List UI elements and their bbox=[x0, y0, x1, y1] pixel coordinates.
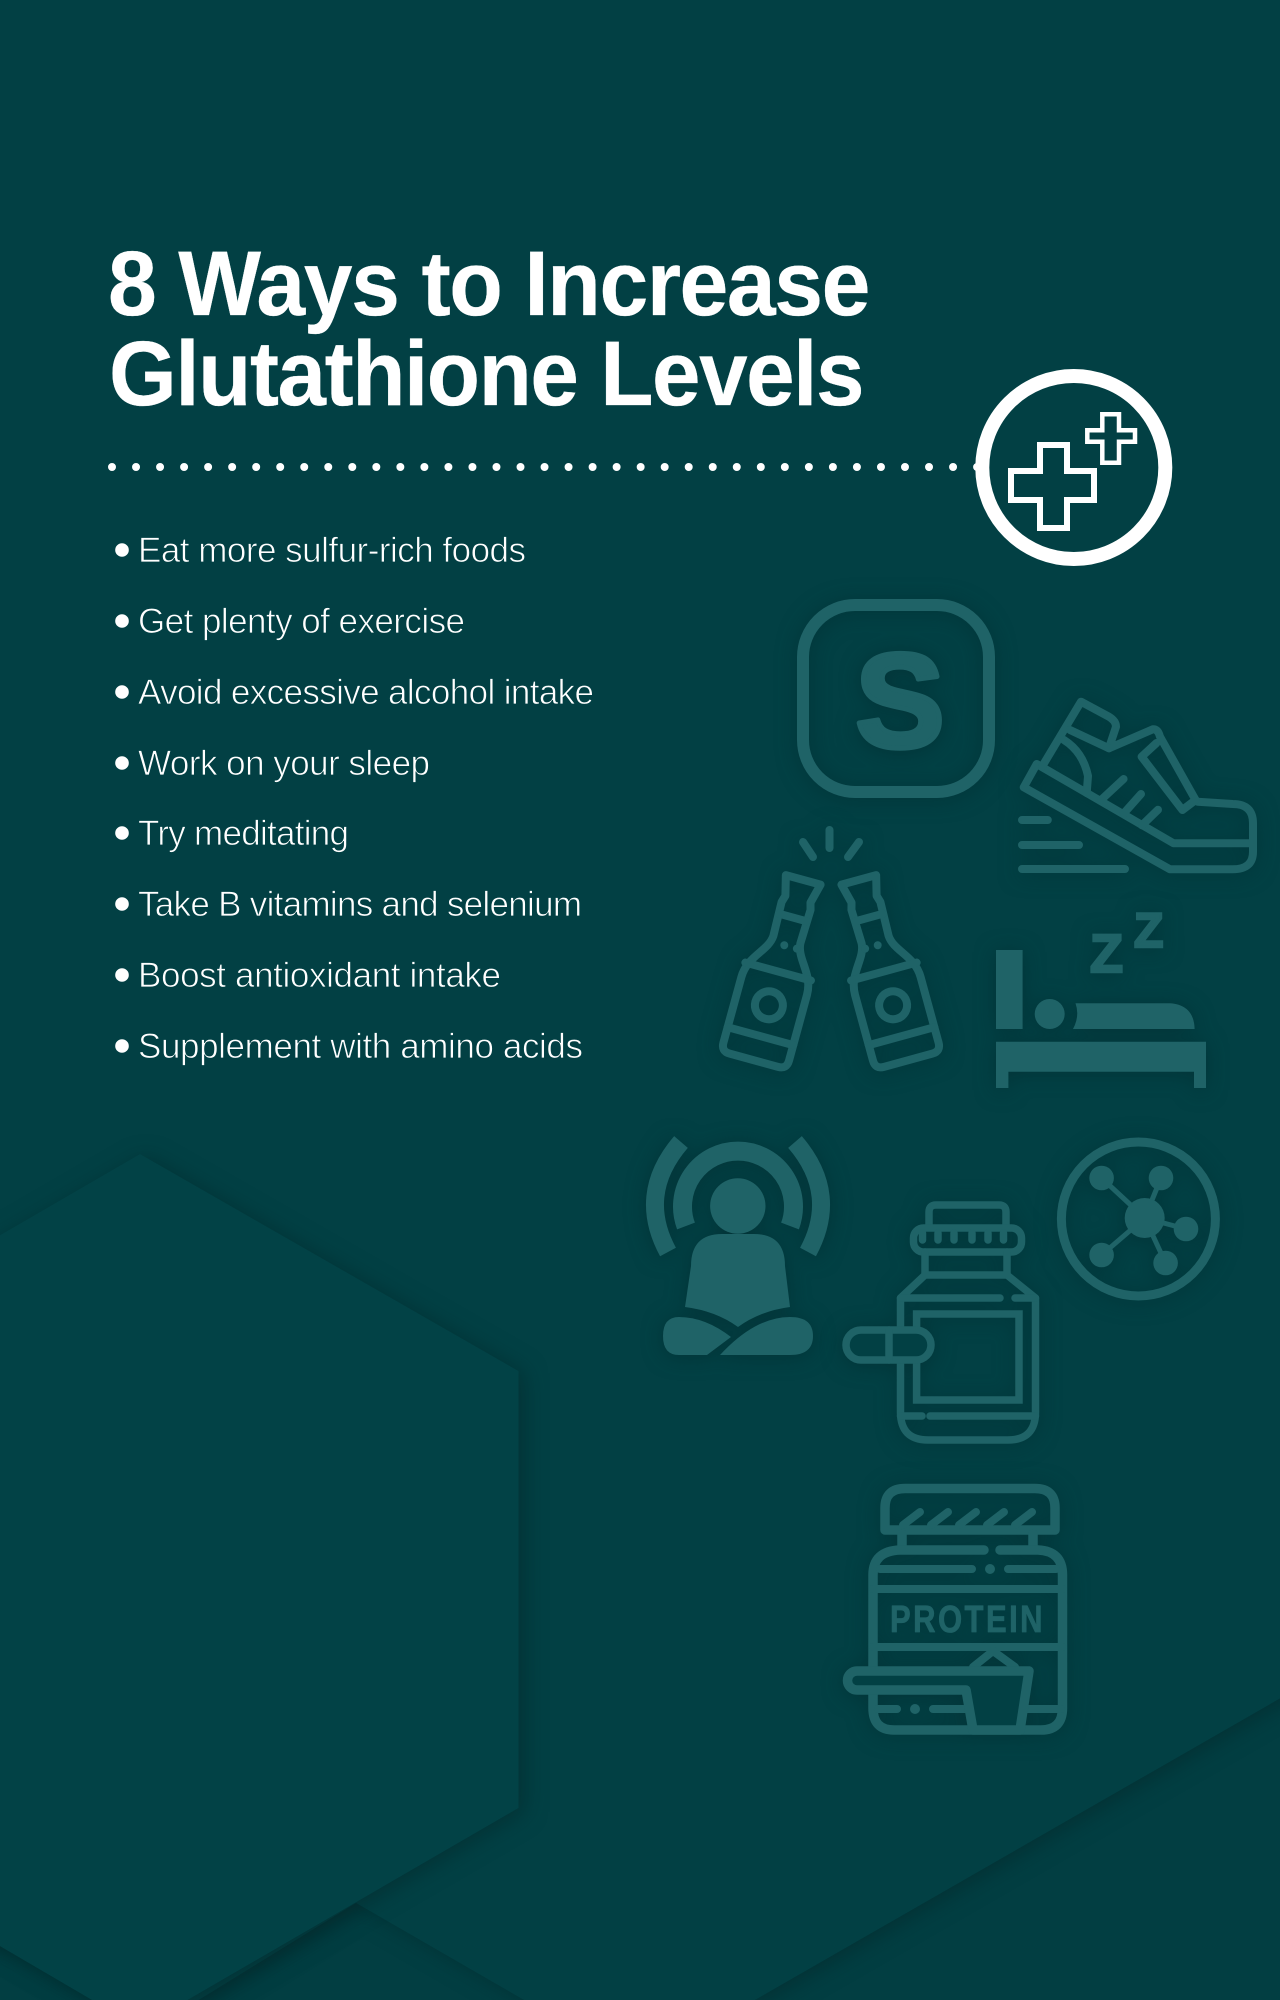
bullet 7: Boost antioxidant intake bbox=[138, 956, 501, 995]
bullet 3: Avoid excessive alcohol intake bbox=[138, 673, 594, 712]
dotted divider bbox=[112, 463, 978, 471]
right bottle bbox=[826, 871, 941, 1069]
icon: sulfur S tile bbox=[803, 605, 989, 792]
bullet 8: Supplement with amino acids bbox=[138, 1027, 583, 1066]
icon: sulfur S tile: S bbox=[855, 627, 945, 776]
bullet 6: Take B vitamins and selenium bbox=[138, 885, 582, 924]
icon: clinking bottles bbox=[721, 830, 941, 1069]
list of eight ways bbox=[115, 531, 594, 1066]
icon: bed with sleeper: Z bbox=[1134, 905, 1163, 958]
spark lines bbox=[803, 830, 859, 857]
icon: medical plus badge bbox=[982, 376, 1165, 559]
icon: antioxidant molecule bbox=[1061, 1142, 1215, 1296]
icon: bed with sleeper: Z bbox=[1090, 924, 1123, 984]
icon: bed with sleeper bbox=[996, 905, 1206, 1088]
title: Glutathione Levels bbox=[109, 323, 863, 425]
pill bbox=[846, 1330, 931, 1360]
icon: vitamin bottle with pill bbox=[846, 1205, 1036, 1440]
left bottle bbox=[721, 871, 836, 1069]
icon: running shoe bbox=[1022, 702, 1253, 869]
icon: protein powder jar with scoop bbox=[848, 1488, 1062, 1730]
title: 8 Ways to Increase bbox=[108, 233, 869, 335]
title bbox=[108, 233, 869, 425]
bullet 5: Try meditating bbox=[138, 814, 349, 853]
bullet 4: Work on your sleep bbox=[138, 744, 430, 783]
icon: protein powder jar with scoop: PROTEIN bbox=[890, 1599, 1045, 1641]
icon: meditating person bbox=[655, 1142, 821, 1355]
bullet 1: Eat more sulfur-rich foods bbox=[138, 531, 526, 570]
bullet 2: Get plenty of exercise bbox=[138, 602, 465, 641]
